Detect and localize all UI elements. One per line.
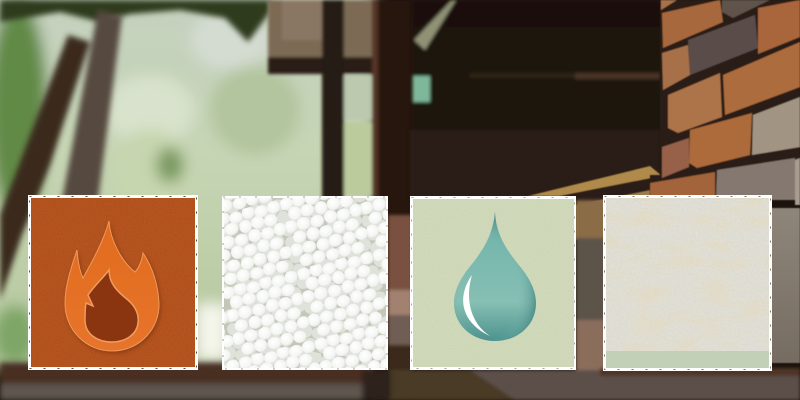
- card ticks: [604, 196, 770, 370]
- garden foliage background: [0, 0, 375, 370]
- timber posts and beam: [268, 0, 414, 400]
- wooden deck: [388, 200, 800, 400]
- tree canopy: [0, 0, 270, 42]
- concrete wall at right: [770, 208, 800, 363]
- tree trunks: [0, 10, 122, 300]
- ground and low wall at left: [0, 363, 390, 400]
- wooden planks: [528, 166, 662, 240]
- card: fibre insulation: [603, 195, 772, 371]
- card: fire resistance: [28, 195, 198, 370]
- icon: flame: [65, 221, 161, 353]
- brick wall: [650, 0, 800, 205]
- card: water resistance: [410, 196, 576, 370]
- icon: water drop: [454, 212, 536, 341]
- dark roof interior: [410, 0, 662, 200]
- card ticks: [30, 196, 196, 368]
- card ticks: [223, 197, 387, 369]
- card ticks: [412, 198, 574, 368]
- card: white beads: [222, 196, 388, 370]
- green base strip: [606, 351, 769, 368]
